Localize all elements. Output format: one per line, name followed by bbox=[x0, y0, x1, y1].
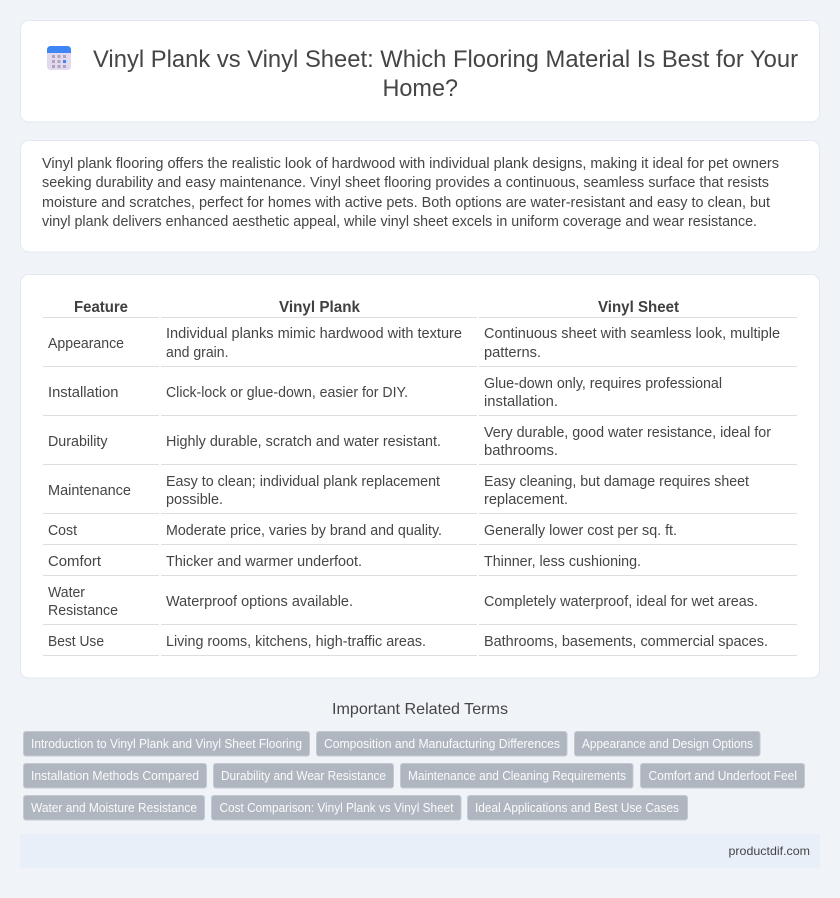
panel: comparison table bbox=[20, 274, 820, 678]
row: water resistance: Waterproof options available. bbox=[166, 594, 353, 610]
tag: composition: Composition and Manufacturing Differences bbox=[324, 737, 560, 751]
row: cost: Moderate price, varies by brand and quality. bbox=[166, 523, 442, 539]
row: durability: Durability bbox=[48, 434, 108, 450]
row: appearance: Appearance bbox=[48, 336, 124, 352]
row: best use: Bathrooms, basements, commercial spaces. bbox=[484, 634, 768, 650]
row: comfort: Thinner, less cushioning. bbox=[484, 554, 641, 570]
tag: introduction: Introduction to Vinyl Plank and Vinyl Sheet Flooring bbox=[31, 737, 302, 751]
row: water resistance: Completely waterproof, ideal for wet areas. bbox=[484, 594, 758, 610]
row: installation: Glue-down only, requires professional bbox=[484, 376, 722, 392]
row: appearance: Continuous sheet with seamless look, multiple bbox=[484, 326, 780, 342]
summary paragraph: seeking durability and easy maintenance. Vinyl sheet flooring provides a continuous, seamless surface that resists bbox=[42, 175, 769, 191]
tag: maintenance: Maintenance and Cleaning Requirements bbox=[408, 769, 626, 783]
row: maintenance: Easy cleaning, but damage requires sheet bbox=[484, 474, 749, 490]
title: Vinyl Plank vs Vinyl Sheet: Which Flooring Material Is Best for Your bbox=[93, 46, 798, 73]
tag: comfort: Comfort and Underfoot Feel bbox=[648, 769, 797, 783]
row: comfort bbox=[43, 554, 797, 576]
table header: Vinyl Sheet bbox=[598, 299, 680, 316]
tag: durability bbox=[214, 764, 394, 788]
row: installation: installation. bbox=[484, 394, 558, 410]
tag: appearance: Appearance and Design Options bbox=[582, 737, 753, 751]
title: Home? bbox=[382, 75, 458, 102]
tag: comfort bbox=[640, 764, 804, 788]
tag: installation: Installation Methods Compared bbox=[31, 769, 199, 783]
row: cost: Generally lower cost per sq. ft. bbox=[484, 523, 677, 539]
row: best use: Best Use bbox=[48, 634, 104, 650]
row: durability: Very durable, good water resistance, ideal for bbox=[484, 425, 771, 441]
row: maintenance: replacement. bbox=[484, 492, 568, 508]
row: maintenance bbox=[43, 474, 797, 514]
title bbox=[93, 46, 798, 102]
row: durability: Highly durable, scratch and water resistant. bbox=[166, 434, 441, 450]
tag: introduction bbox=[24, 732, 310, 756]
row: maintenance: possible. bbox=[166, 492, 223, 508]
table header: Feature bbox=[74, 299, 128, 316]
summary paragraph: Vinyl plank flooring offers the realistic look of hardwood with individual plank designs, making it ideal for pet owners bbox=[42, 156, 779, 172]
row: installation: Installation bbox=[48, 385, 118, 401]
row: installation: Click-lock or glue-down, easier for DIY. bbox=[166, 385, 408, 401]
row: durability: bathrooms. bbox=[484, 443, 558, 459]
row: appearance: patterns. bbox=[484, 345, 541, 361]
tag: water bbox=[24, 796, 204, 820]
row: cost: Cost bbox=[48, 523, 77, 539]
panel: title card bbox=[20, 20, 820, 122]
table header bbox=[43, 299, 797, 318]
row: maintenance: Easy to clean; individual plank replacement bbox=[166, 474, 440, 490]
summary paragraph bbox=[42, 156, 779, 230]
footer bar bbox=[20, 834, 820, 868]
row: appearance: and grain. bbox=[166, 345, 228, 361]
summary paragraph: moisture and scratches, perfect for homes with active pets. Both options are water-resistant and easy to clean, but bbox=[42, 195, 770, 211]
tag: water: Water and Moisture Resistance bbox=[31, 801, 197, 815]
row: best use: Living rooms, kitchens, high-traffic areas. bbox=[166, 634, 426, 650]
row: appearance bbox=[43, 326, 797, 367]
tag: appearance bbox=[574, 732, 760, 756]
tag: maintenance bbox=[400, 764, 633, 788]
row: cost bbox=[43, 523, 797, 545]
tag: cost: Cost Comparison: Vinyl Plank vs Vinyl Sheet bbox=[220, 801, 454, 815]
tag: durability: Durability and Wear Resistance bbox=[221, 769, 386, 783]
row: comfort: Comfort bbox=[48, 554, 101, 570]
row: water resistance: Water bbox=[48, 585, 85, 601]
row: best use bbox=[43, 634, 797, 656]
row: water resistance: Resistance bbox=[48, 603, 118, 619]
row: durability bbox=[43, 425, 797, 465]
table header: Vinyl Plank bbox=[279, 299, 360, 316]
panel: summary text bbox=[20, 140, 820, 252]
tag: cost bbox=[212, 796, 461, 820]
tag: applications bbox=[468, 796, 688, 820]
row: appearance: Individual planks mimic hardwood with texture bbox=[166, 326, 462, 342]
tag: composition bbox=[316, 732, 567, 756]
heading: important related terms: Important Related Terms bbox=[332, 701, 508, 718]
tag: applications: Ideal Applications and Best Use Cases bbox=[475, 801, 679, 815]
tag: installation bbox=[24, 764, 206, 788]
footer bar: productdif.com bbox=[728, 844, 810, 858]
related term tags bbox=[24, 732, 804, 820]
row: maintenance: Maintenance bbox=[48, 483, 131, 499]
row: water resistance bbox=[43, 585, 797, 625]
row: comfort: Thicker and warmer underfoot. bbox=[166, 554, 362, 570]
row: installation bbox=[43, 376, 797, 416]
summary paragraph: vinyl plank delivers enhanced aesthetic appeal, while vinyl sheet excels in uniform coverage and wear resistance. bbox=[42, 214, 757, 230]
icon: calendar bbox=[47, 46, 71, 70]
